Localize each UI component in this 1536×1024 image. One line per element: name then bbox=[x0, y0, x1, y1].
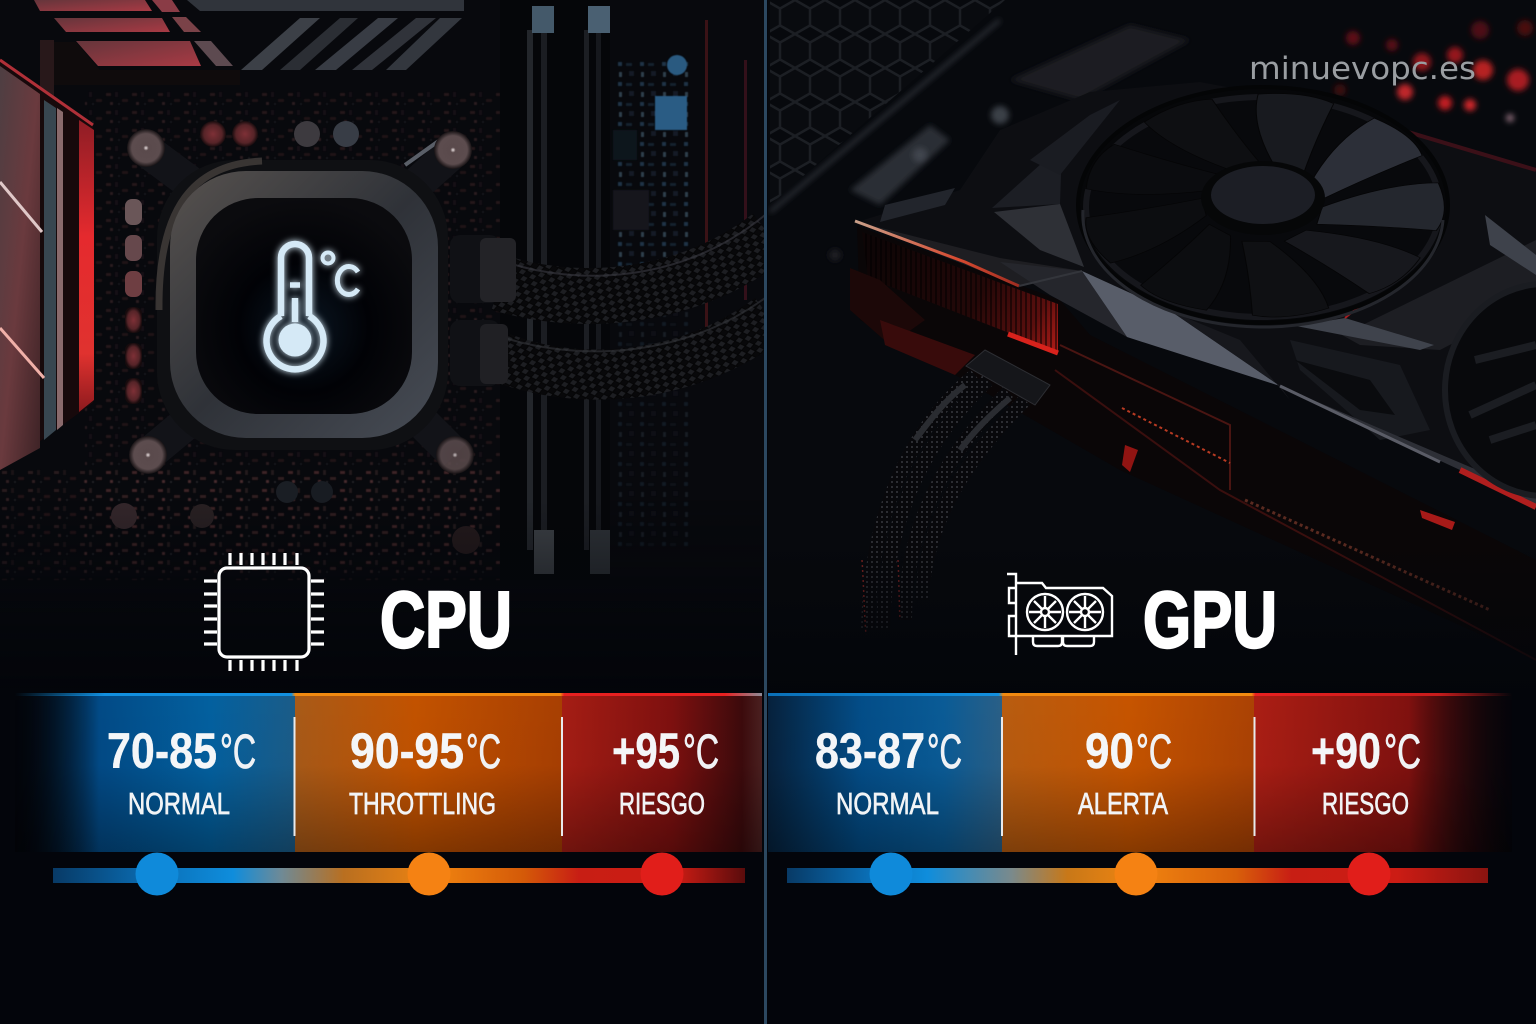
GPU shroud bbox=[855, 82, 1536, 507]
CPU temperature slider bbox=[53, 852, 745, 896]
band: alerta GPU: 90 bbox=[1085, 723, 1134, 779]
blurred case background bbox=[770, 20, 1190, 261]
power cables bbox=[862, 350, 1050, 635]
band: normal CPU: NORMAL bbox=[128, 786, 230, 821]
panel: CPU photo bbox=[0, 0, 770, 700]
red background LEDs bbox=[1334, 20, 1533, 122]
GPU second fan bbox=[1445, 284, 1536, 496]
band: alerta GPU bbox=[1078, 723, 1172, 821]
band: normal CPU: 70-85 bbox=[107, 723, 217, 779]
icon: thermometer on display bbox=[266, 244, 358, 369]
band: riesgo GPU: +90 bbox=[1311, 723, 1381, 779]
panel: CPU temperature bands bbox=[15, 693, 762, 852]
band: normal CPU: °C bbox=[220, 726, 256, 779]
honeycomb case grille bbox=[770, 0, 1005, 205]
band: riesgo GPU: RIESGO bbox=[1322, 786, 1409, 821]
VRM heatsink bbox=[34, 0, 464, 96]
heading: GPU: GPU bbox=[1143, 575, 1277, 664]
power connector bbox=[966, 350, 1050, 405]
panel: GPU photo bbox=[768, 0, 1536, 700]
band: riesgo CPU: +95 bbox=[612, 723, 680, 779]
band: riesgo CPU: RIESGO bbox=[619, 786, 705, 821]
GPU main fan bbox=[1070, 83, 1457, 327]
band: throttling CPU: 90-95 bbox=[350, 723, 464, 779]
band: normal GPU: °C bbox=[927, 726, 962, 779]
band: normal GPU: 83-87 bbox=[815, 723, 925, 779]
band: normal GPU bbox=[815, 723, 962, 821]
capacitors bbox=[111, 121, 480, 554]
band: throttling CPU: °C bbox=[466, 726, 501, 779]
GPU edge highlights bbox=[855, 100, 1536, 507]
GPU side heatsink bbox=[850, 226, 1536, 660]
mounting brackets and screws bbox=[127, 129, 474, 474]
band: normal CPU bbox=[107, 723, 256, 821]
watermark: minuevopc.es bbox=[1249, 51, 1476, 87]
band: alerta GPU: ALERTA bbox=[1078, 786, 1168, 821]
GPU temperature slider bbox=[787, 852, 1488, 896]
band: riesgo GPU: °C bbox=[1384, 726, 1421, 779]
band: throttling CPU bbox=[349, 723, 501, 821]
motherboard circuit detail bbox=[0, 55, 692, 580]
band: alerta GPU: °C bbox=[1136, 726, 1172, 779]
red lit memory module bbox=[0, 58, 94, 470]
heading: CPU: CPU bbox=[380, 575, 512, 664]
center divider bbox=[764, 0, 767, 1024]
band: normal GPU: NORMAL bbox=[836, 786, 939, 821]
RAM slots bbox=[500, 0, 747, 580]
band: riesgo CPU bbox=[612, 723, 719, 821]
icon: GPU card bbox=[1007, 574, 1112, 655]
band: throttling CPU: THROTTLING bbox=[349, 786, 496, 821]
panel: GPU temperature bands bbox=[768, 693, 1512, 852]
icon: CPU chip bbox=[204, 553, 324, 671]
liquid cooler tubes bbox=[450, 215, 770, 386]
CPU cooler pump head bbox=[157, 160, 448, 450]
band: riesgo GPU bbox=[1311, 723, 1421, 821]
band: riesgo CPU: °C bbox=[683, 726, 719, 779]
